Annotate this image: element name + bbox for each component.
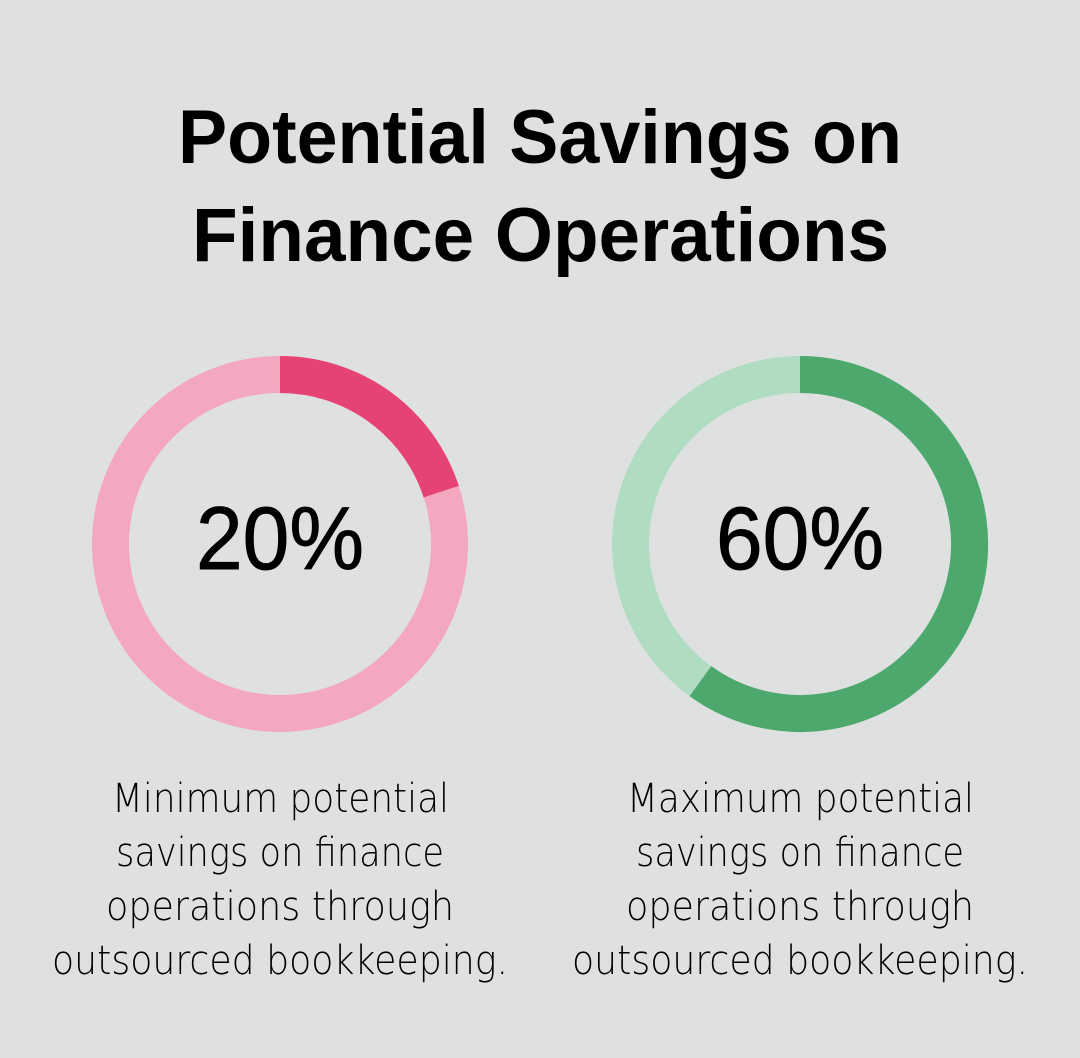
description: minimum savings: Minimum potential	[112, 776, 449, 822]
title	[178, 95, 902, 278]
donut chart: 20%	[110, 374, 450, 714]
description: minimum savings: operations through	[106, 884, 454, 930]
panel: maximum savings	[572, 374, 1028, 984]
description: minimum savings	[52, 776, 508, 984]
description: maximum savings: outsourced bookkeeping.	[572, 938, 1028, 984]
donut chart: 60%	[630, 374, 970, 714]
panel: minimum savings	[52, 374, 508, 984]
description: maximum savings: Maximum potential	[627, 776, 974, 822]
value: 20%: 20%	[196, 488, 364, 588]
description: minimum savings: outsourced bookkeeping.	[52, 938, 508, 984]
title: Finance Operations	[192, 193, 889, 278]
description: maximum savings	[572, 776, 1028, 984]
title: Potential Savings on	[178, 95, 902, 180]
description: maximum savings: operations through	[626, 884, 974, 930]
description: minimum savings: savings on finance	[116, 830, 444, 876]
description: maximum savings: savings on finance	[636, 830, 964, 876]
value: 60%: 60%	[716, 488, 884, 588]
